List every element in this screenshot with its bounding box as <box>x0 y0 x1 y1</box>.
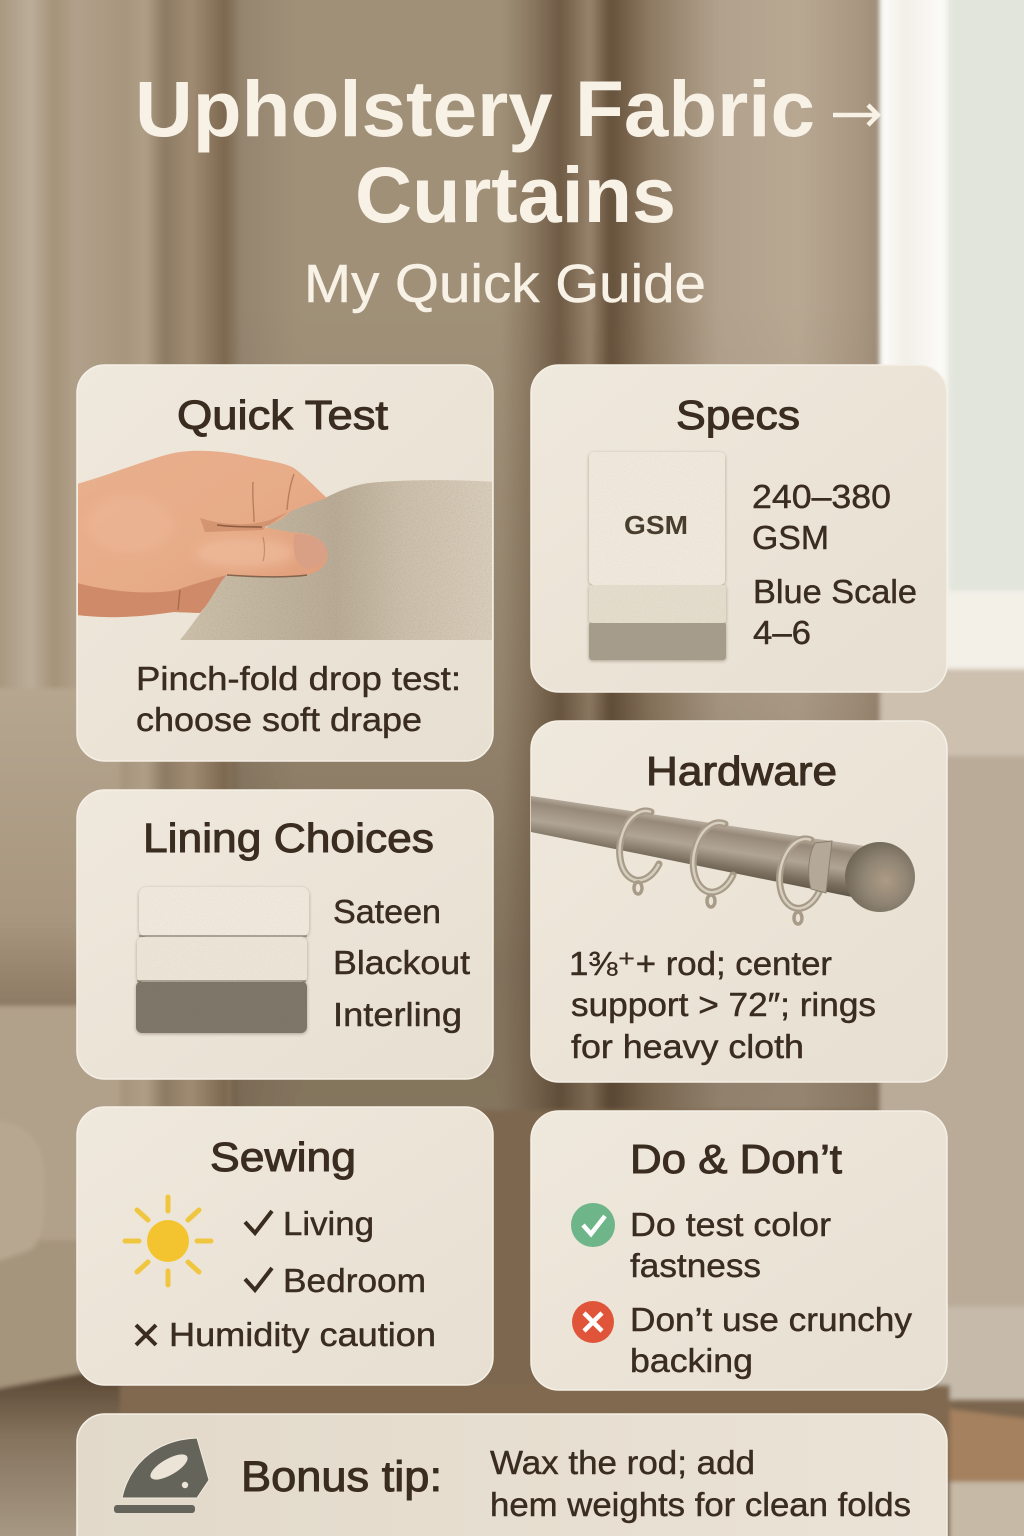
heading: quick test: Quick Test <box>177 392 389 438</box>
bonus tip text <box>490 1444 911 1523</box>
icon: red cross <box>572 1301 614 1343</box>
lining list: Interling <box>333 996 462 1033</box>
icon: fabric swatch stack <box>589 452 726 660</box>
heading: lining choices: Lining Choices <box>143 815 434 861</box>
quick test caption <box>136 660 461 738</box>
list: sewing suitability: Living <box>283 1205 374 1242</box>
lining list: Sateen <box>333 893 441 930</box>
title: My Quick Guide <box>304 254 706 314</box>
list: sewing suitability: Humidity caution <box>169 1316 436 1353</box>
icon: fabric swatch stack: GSM <box>624 510 688 540</box>
panel: bonus tip <box>77 1414 947 1536</box>
don't text <box>630 1301 913 1379</box>
hardware caption: support > 72″; rings <box>571 986 876 1023</box>
quick test caption: choose soft drape <box>136 701 422 738</box>
bonus tip text: hem weights for clean folds <box>490 1486 911 1523</box>
spec values: 240–380 <box>752 478 891 515</box>
title: Curtains <box>355 150 676 239</box>
do text: Do test color <box>630 1206 831 1243</box>
spec values <box>752 478 917 651</box>
lining list <box>333 893 470 1033</box>
panel: hardware <box>531 721 947 1082</box>
icon: lining fabric stack <box>136 887 309 1033</box>
quick test caption: Pinch-fold drop test: <box>136 660 461 697</box>
icon: iron <box>114 1438 209 1513</box>
panel: specs <box>531 365 947 692</box>
heading: hardware: Hardware <box>646 748 837 794</box>
heading: do and don't: Do & Don’t <box>630 1136 843 1182</box>
list: sewing suitability: Bedroom <box>283 1262 426 1299</box>
do text <box>630 1206 831 1284</box>
icon: sun <box>125 1197 211 1285</box>
spec values: GSM <box>752 519 829 556</box>
icon: green check <box>571 1203 615 1247</box>
panel: do and don't <box>531 1111 947 1390</box>
spec values: 4–6 <box>753 614 811 651</box>
do text: fastness <box>630 1247 761 1284</box>
illustration: hand pinching fabric <box>77 451 495 640</box>
panel: quick test <box>77 365 495 761</box>
don't text: Don’t use crunchy <box>630 1301 913 1338</box>
list: sewing suitability <box>136 1205 436 1353</box>
hardware caption: 1⅜⁺+ rod; center <box>569 945 832 982</box>
illustration: curtain rod with rings <box>531 796 915 924</box>
bonus tip text: Wax the rod; add <box>490 1444 755 1481</box>
heading: specs: Specs <box>676 392 800 438</box>
bonus tip label: Bonus tip: <box>241 1453 442 1501</box>
lining list: Blackout <box>333 944 470 981</box>
hardware caption: for heavy cloth <box>571 1028 804 1065</box>
panel: lining choices <box>77 790 493 1079</box>
hardware caption <box>569 945 876 1065</box>
title: Upholstery Fabric <box>135 64 815 153</box>
spec values: Blue Scale <box>753 573 917 610</box>
don't text: backing <box>630 1342 753 1379</box>
title arrow <box>833 105 878 125</box>
panel: sewing <box>77 1107 493 1385</box>
heading: sewing: Sewing <box>210 1134 356 1180</box>
title <box>135 64 878 314</box>
